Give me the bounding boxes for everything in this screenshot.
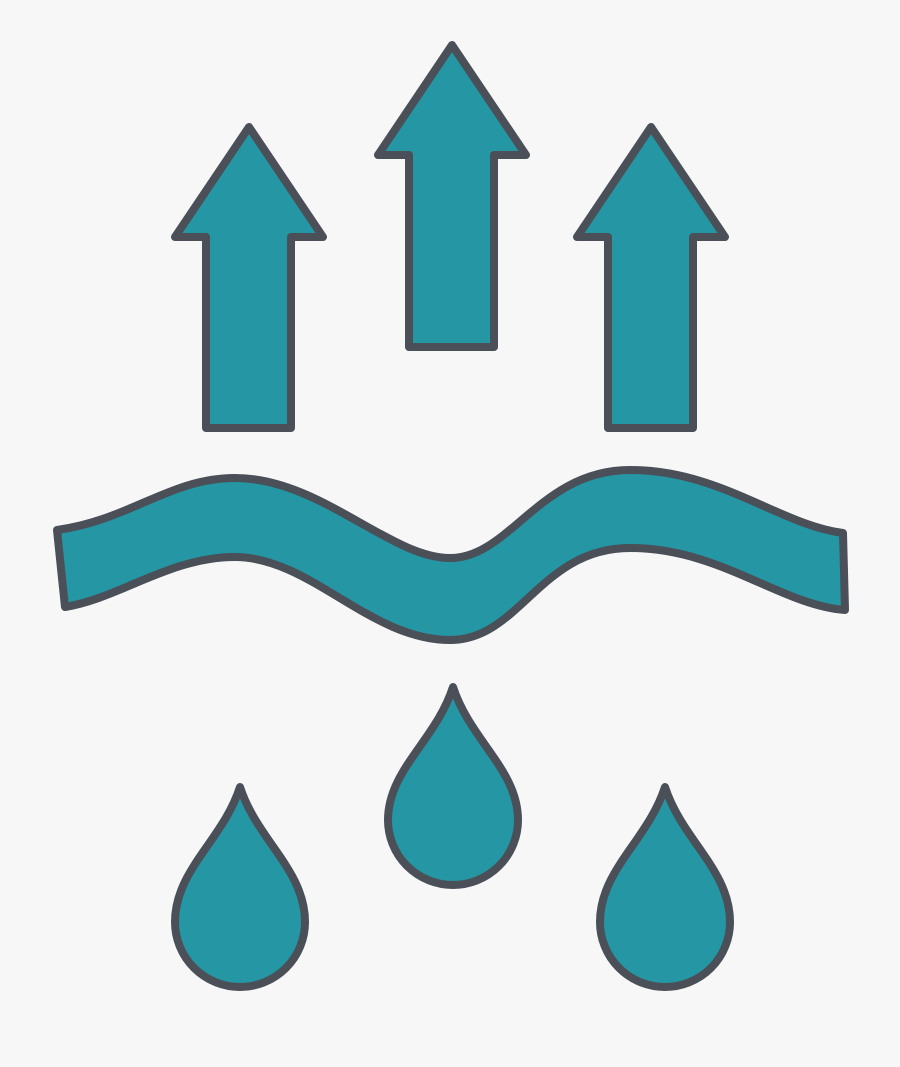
drop: left	[175, 787, 305, 987]
arrow: right up	[577, 127, 725, 428]
arrow: middle up	[378, 45, 526, 347]
drop: right	[600, 787, 730, 987]
arrow: left up	[175, 127, 323, 428]
wave	[57, 470, 845, 640]
drop: middle	[388, 687, 518, 885]
